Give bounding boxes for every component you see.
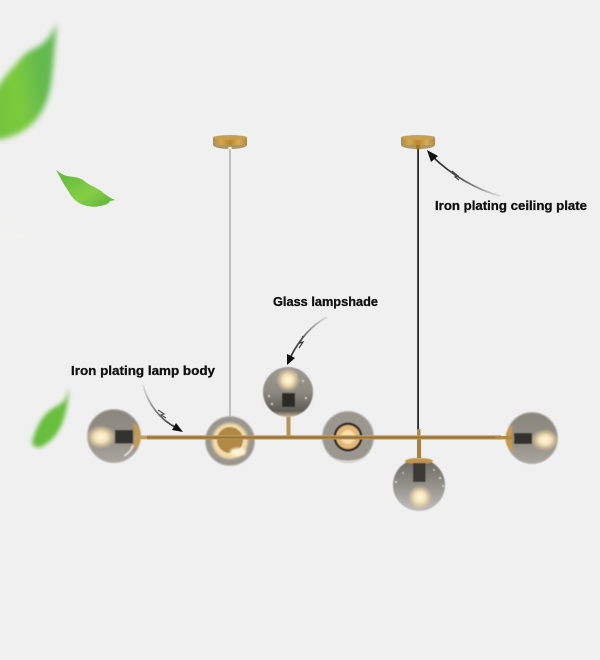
ceiling plate: left <box>213 135 247 149</box>
arrow: ceiling plate <box>427 150 500 196</box>
lamp body: stem to upper globe <box>286 416 290 436</box>
right cord <box>417 148 419 436</box>
left cord <box>229 148 231 420</box>
globe: upper <box>263 367 313 417</box>
globe: far right <box>506 412 559 464</box>
globe: far left <box>86 409 141 463</box>
lamp body: horizontal brass bar <box>135 435 513 440</box>
arrow: glass lampshade <box>287 317 327 365</box>
ceiling plate: right <box>401 135 435 149</box>
globe: center with ring <box>322 411 374 463</box>
icon: faint background leaves <box>0 215 30 241</box>
globe: lower <box>393 458 445 511</box>
arrow: lamp body <box>143 385 183 432</box>
lamp body: stem to lower globe <box>417 429 421 458</box>
label: ceiling plate: Iron plating ceiling plate <box>435 199 587 213</box>
label: lamp body: Iron plating lamp body <box>71 364 215 378</box>
globe: second with brass canopy <box>205 416 255 466</box>
label: glass lampshade: Glass lampshade <box>273 295 378 309</box>
icon: lower blurred leaf <box>32 388 69 447</box>
icon: large blurred leaf <box>0 22 57 140</box>
icon: small sharp leaf <box>56 170 115 207</box>
